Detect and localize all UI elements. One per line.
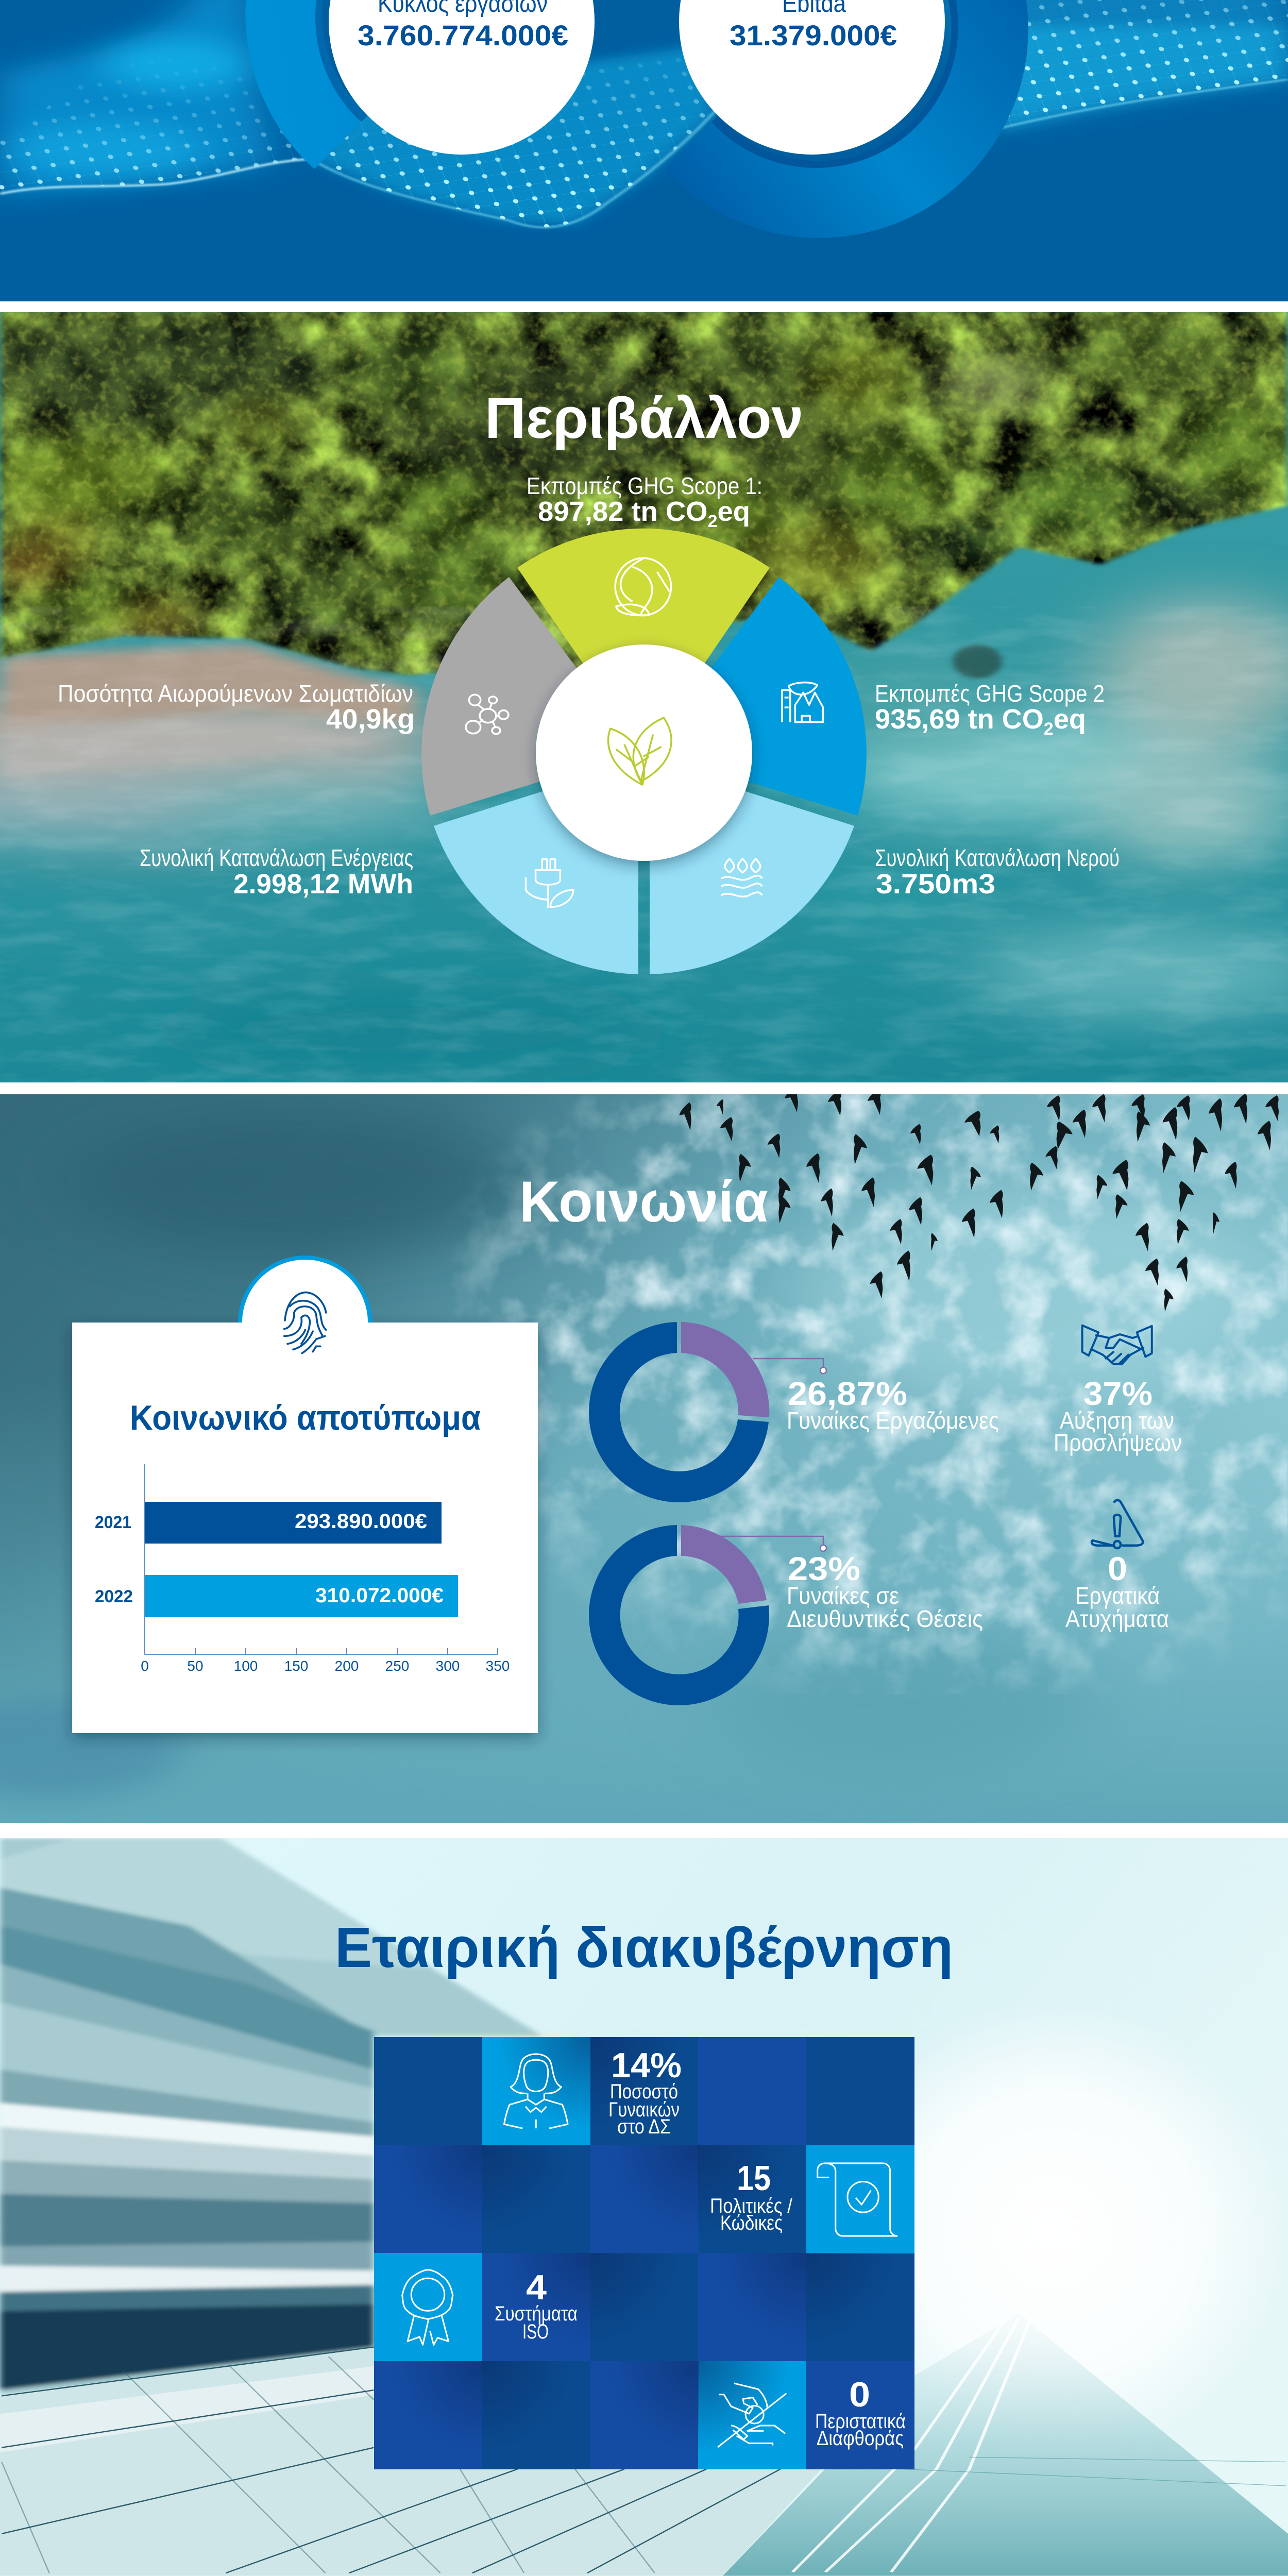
icon: leaf center [608, 718, 671, 785]
stat: women employees [787, 1375, 999, 1434]
value: ebitda: 31.379.000€ [730, 19, 897, 52]
stat: hiring increase [1054, 1375, 1182, 1456]
bar: 2021 [95, 1502, 442, 1544]
axis labels: 350 [486, 1658, 510, 1674]
icon: no bribery hands [718, 2383, 786, 2447]
card: turnover [329, 0, 595, 155]
tile: policies: Πολιτικές / [710, 2195, 793, 2217]
icon: warning triangle [1092, 1500, 1143, 1548]
icon: fingerprint [284, 1292, 326, 1353]
bar: 2021: 2021 [95, 1513, 131, 1532]
axis labels: 200 [335, 1658, 359, 1674]
tile: women on the board [608, 2046, 682, 2138]
value: energy: 2.998,12 MWh [233, 869, 413, 900]
value: GHG scope 2: eq [1054, 704, 1086, 735]
donut: women in management [589, 1525, 826, 1705]
tile: ISO systems: Συστήματα [495, 2302, 578, 2325]
heading: corporate governance: Εταιρική διακυβέρνηση [335, 1916, 953, 1979]
center circle [536, 645, 752, 861]
value: GHG scope 2: 935,69 tn CO [875, 704, 1043, 735]
panel: society [0, 1083, 1288, 1823]
icon: scroll with check [818, 2163, 897, 2236]
stat: work accidents: Εργατικά [1075, 1582, 1160, 1609]
value: turnover: 3.760.774.000€ [358, 19, 568, 52]
label: GHG scope 1 [527, 472, 762, 531]
bar: 2022 [95, 1575, 458, 1617]
stat: hiring increase: 37% [1083, 1375, 1153, 1412]
background: sky with clouds and birds [0, 1083, 1288, 1823]
bar: 2022: 2022 [95, 1587, 133, 1606]
tile: women on the board: Γυναικών [608, 2098, 680, 2121]
tile: women on the board: 14% [611, 2046, 682, 2085]
label: water: Συνολική Κατανάλωση Νερού [875, 844, 1120, 871]
bar: 2022: 310.072.000€ [315, 1584, 444, 1607]
sector: scope 1 [517, 529, 770, 752]
infinity ring [245, 0, 1028, 238]
value: particulates: 40,9kg [326, 704, 415, 735]
sector: scope 2 [696, 577, 867, 816]
stat: women in management: Διευθυντικές Θέσεις [787, 1605, 983, 1632]
stat: women employees: Γυναίκες Εργαζόμενες [787, 1407, 999, 1434]
value: GHG scope 1: 2 [707, 512, 718, 531]
tile: policies: Κώδικες [720, 2212, 783, 2234]
panel: corporate governance [0, 1838, 1288, 2576]
bar: 2021: 293.890.000€ [295, 1510, 427, 1533]
label: GHG scope 2: Εκπομπές GHG Scope 2 [875, 680, 1105, 707]
stat: work accidents [1065, 1550, 1169, 1632]
icon: earth and leaf [615, 558, 671, 616]
tile: ISO systems [495, 2268, 578, 2343]
sector: energy [434, 784, 638, 974]
label: energy: Συνολική Κατανάλωση Ενέργειας [140, 844, 413, 871]
sector: water [650, 784, 854, 974]
tile: corruption incidents: Περιστατικά [815, 2410, 906, 2433]
tile grid [374, 2037, 914, 2469]
label: particulates [58, 680, 415, 735]
background: forest and sea photo [0, 311, 1288, 1082]
axis labels: 250 [385, 1658, 409, 1674]
icon: plug and leaf [526, 859, 573, 908]
tile: women on the board: Ποσοστό [610, 2080, 678, 2103]
stat: work accidents: 0 [1108, 1550, 1127, 1587]
fingerprint badge [240, 1258, 370, 1353]
axis labels: 100 [234, 1658, 258, 1674]
stat: women in management: Γυναίκες σε [787, 1582, 899, 1609]
axis labels: 50 [187, 1658, 204, 1674]
label: water [875, 844, 1120, 900]
tile: ISO systems: ISO [522, 2320, 549, 2343]
stat: women in management: 23% [788, 1550, 860, 1587]
stat: hiring increase: Προσλήψεων [1054, 1429, 1182, 1456]
heading: environment: Περιβάλλον [485, 386, 803, 450]
tile: policies: 15 [737, 2159, 771, 2198]
axis labels: 0 [141, 1658, 149, 1674]
donut: women employees [589, 1322, 826, 1502]
bar chart [95, 1464, 510, 1674]
label: particulates: Ποσότητα Αιωρούμενων Σωματιδίων [58, 680, 413, 707]
env icons [466, 558, 823, 908]
icon: factory [782, 683, 823, 722]
label: GHG scope 2 [875, 680, 1105, 739]
icon: rosette [402, 2269, 453, 2345]
icon: handshake [1082, 1326, 1152, 1364]
stat: hiring increase: Αύξηση των [1060, 1407, 1174, 1434]
icon: molecule [466, 694, 509, 734]
axis labels [141, 1658, 510, 1674]
tile: corruption incidents: 0 [849, 2375, 870, 2414]
tile: corruption incidents: Διαφθοράς [817, 2427, 904, 2450]
stat: women in management [787, 1550, 983, 1632]
tile: corruption incidents [815, 2375, 906, 2450]
background: digital mesh wave [0, 0, 1288, 236]
stat: work accidents: Ατυχήματα [1065, 1605, 1169, 1632]
tile: women on the board: στο ΔΣ [617, 2115, 671, 2138]
icon: water drops and waves [721, 859, 762, 896]
stat: women employees: 26,87% [788, 1375, 907, 1412]
panel: financial results [0, 0, 1288, 301]
heading: society: Κοινωνία [519, 1170, 768, 1234]
heading: social footprint: Κοινωνικό αποτύπωμα [130, 1398, 481, 1437]
donut sectors [421, 529, 867, 974]
white gutters between panels [0, 301, 1288, 1838]
icon: woman [504, 2054, 568, 2128]
card: social footprint [72, 1258, 538, 1733]
sector: particulates [421, 577, 592, 816]
value: GHG scope 1: 897,82 tn CO [538, 496, 706, 527]
axis labels: 150 [284, 1658, 308, 1674]
value: GHG scope 1: eq [718, 496, 750, 527]
label: energy [140, 844, 413, 900]
panel: environment [0, 311, 1288, 1082]
card: ebitda [679, 0, 945, 155]
label: GHG scope 1: Εκπομπές GHG Scope 1: [527, 472, 762, 499]
value: water: 3.750m3 [876, 869, 995, 900]
value: GHG scope 2: 2 [1044, 719, 1054, 739]
tile: policies [710, 2159, 793, 2234]
axis labels: 300 [436, 1658, 460, 1674]
background: glass buildings photo [0, 1838, 1288, 2576]
tile: ISO systems: 4 [526, 2268, 547, 2307]
